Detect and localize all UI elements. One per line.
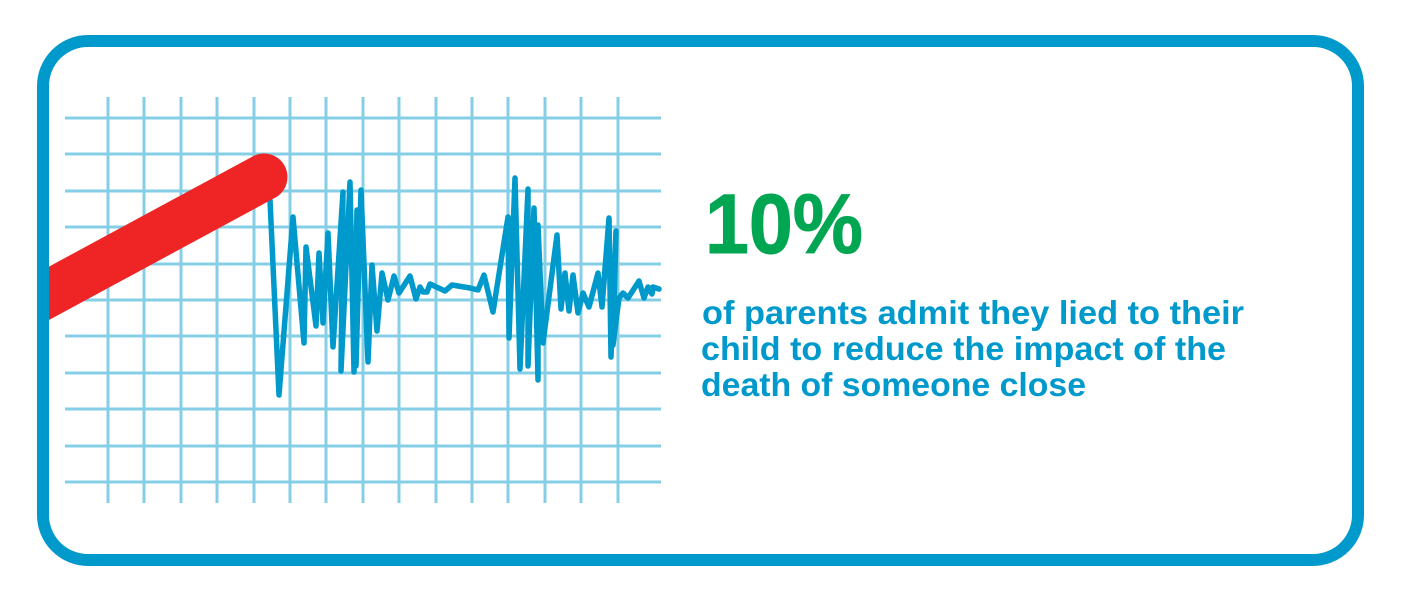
statistic: 10%: 10% (705, 177, 863, 271)
description text: death of someone close (701, 366, 1086, 403)
description text: of parents admit they lied to their (702, 294, 1244, 331)
waveform line (270, 178, 659, 395)
description text (701, 294, 1244, 403)
description text: child to reduce the impact of the (701, 330, 1226, 367)
red diagonal needle (20, 177, 264, 309)
chart grid (65, 97, 661, 503)
